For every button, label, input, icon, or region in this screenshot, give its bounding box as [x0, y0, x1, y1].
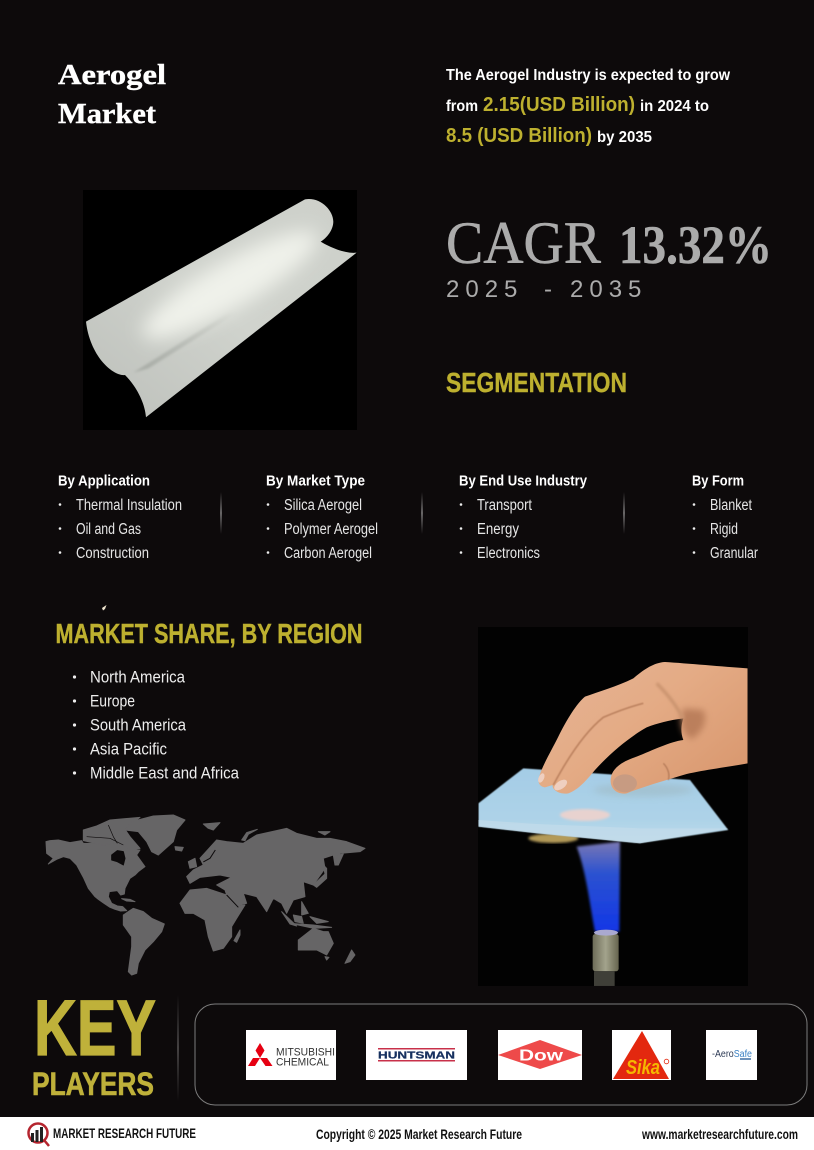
growth statement: 8.5 (USD Billion) — [446, 125, 592, 147]
segment: by form: Blanket — [710, 497, 753, 514]
footer — [0, 1117, 814, 1150]
CAGR figure — [446, 210, 772, 303]
logo: Sika: Sika — [626, 1057, 660, 1079]
segment: by end use industry: Energy — [477, 521, 519, 538]
title: Market — [58, 98, 156, 130]
logo: AeroSafe: -AeroSafe — [712, 1049, 752, 1060]
segment: by end use industry: Transport — [477, 497, 533, 514]
segment: by market type — [266, 472, 378, 562]
CAGR figure: 2025 — [446, 276, 523, 303]
CAGR figure: 2035 — [570, 276, 647, 303]
growth statement: in 2024 to — [640, 98, 709, 115]
logo: Sika — [612, 1030, 671, 1080]
region list: North America — [90, 668, 185, 687]
segment: by market type: Polymer Aerogel — [284, 521, 378, 538]
title: Aerogel — [58, 59, 166, 91]
logo: AeroSafe — [706, 1030, 757, 1080]
photo: hand on aerogel above flame — [478, 627, 748, 986]
segment: by end use industry: By End Use Industry — [459, 472, 588, 490]
segment: by end use industry — [459, 472, 588, 562]
growth statement: The Aerogel Industry is expected to grow — [446, 67, 731, 84]
segment: by application: Oil and Gas — [76, 521, 141, 538]
logo: Dow — [498, 1030, 582, 1080]
heading: key players: KEY — [34, 983, 156, 1072]
logo: Huntsman — [366, 1030, 467, 1080]
CAGR figure: CAGR — [446, 210, 601, 276]
icon: market research future logo — [28, 1124, 49, 1146]
logo: Mitsubishi Chemical: CHEMICAL — [276, 1057, 329, 1069]
segment: by market type: Silica Aerogel — [284, 497, 362, 514]
logo: Mitsubishi Chemical: MITSUBISHI — [276, 1047, 335, 1059]
region list: Europe — [90, 692, 135, 711]
logo: Dow: Dow — [519, 1048, 564, 1064]
segment: by application: Construction — [76, 545, 149, 562]
region list — [73, 668, 239, 782]
copyright: Copyright © 2025 Market Research Future — [316, 1126, 522, 1142]
heading: market share by region: MARKET SHARE, BY REGION — [56, 618, 362, 649]
title — [58, 59, 166, 130]
segment: by form: By Form — [692, 472, 744, 490]
growth statement: 2.15(USD Billion) — [483, 94, 635, 116]
segment: by application: By Application — [58, 472, 150, 490]
footer brand name: MARKET RESEARCH FUTURE — [53, 1125, 196, 1141]
growth statement: by 2035 — [597, 129, 652, 146]
photo: aerogel roll — [83, 190, 357, 430]
segment: by application — [58, 472, 182, 562]
CAGR figure: - — [544, 276, 552, 303]
segment: by end use industry: Electronics — [477, 545, 540, 562]
segment: by market type: By Market Type — [266, 472, 365, 490]
segment: by form: Rigid — [710, 521, 738, 538]
heading: segmentation: SEGMENTATION — [446, 367, 627, 398]
logo: Mitsubishi Chemical — [246, 1030, 336, 1080]
segment: by form: Granular — [710, 545, 758, 562]
world map — [46, 815, 365, 975]
heading: key players — [32, 983, 156, 1102]
segment: by application: Thermal Insulation — [76, 497, 182, 514]
panel: key player logos — [195, 1004, 807, 1105]
region list: South America — [90, 716, 186, 735]
region list: Middle East and Africa — [90, 764, 239, 782]
CAGR figure: 13.32% — [619, 215, 772, 275]
heading: key players: PLAYERS — [32, 1066, 154, 1102]
logo: Huntsman: HUNTSMAN — [378, 1049, 455, 1061]
segment: by market type: Carbon Aerogel — [284, 545, 372, 562]
segment: by form — [692, 472, 758, 562]
growth statement — [446, 67, 731, 147]
growth statement: from — [446, 98, 478, 115]
region list: Asia Pacific — [90, 740, 167, 758]
